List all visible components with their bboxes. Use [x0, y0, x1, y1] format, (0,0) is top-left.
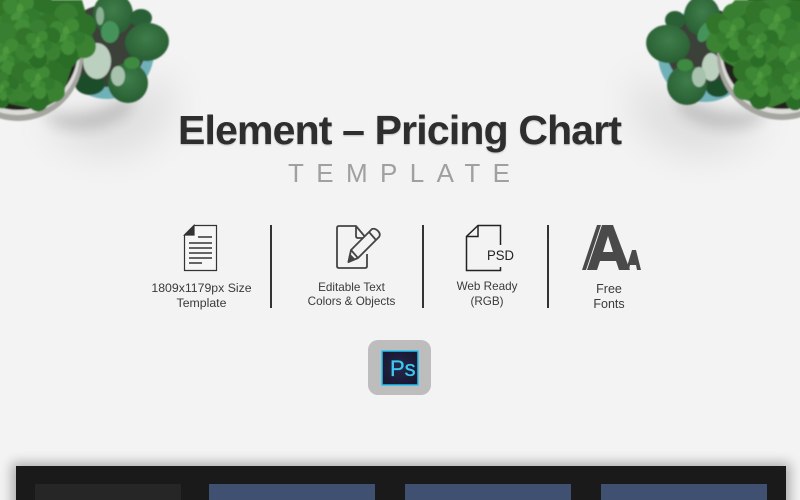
feature: editable text: Colors & Objects — [308, 295, 395, 308]
label: Web Ready — [457, 280, 518, 293]
icon: A4 document — [184, 226, 216, 270]
icon: page with pencil — [337, 226, 380, 268]
divider — [270, 225, 272, 308]
feature: free fonts: Fonts — [593, 297, 625, 311]
feature: size template — [151, 226, 252, 310]
plant shadow: right — [635, 70, 770, 153]
feature: web ready — [457, 226, 518, 308]
feature: web ready: (RGB) — [470, 295, 504, 308]
icon: PSD file: PSD — [487, 247, 514, 263]
column: plan 3 — [601, 484, 767, 500]
label: Editable Text — [318, 281, 386, 294]
column: plan 2 — [405, 484, 571, 500]
pricing chart preview — [12, 463, 790, 500]
icon: letters A a — [582, 225, 641, 270]
panel shadow — [12, 463, 790, 500]
subtitle: TEMPLATE — [288, 158, 510, 188]
divider — [547, 225, 549, 308]
feature: free fonts — [582, 225, 641, 311]
jade plant right — [643, 0, 752, 105]
label: Free — [596, 282, 622, 296]
plant shadow: left — [40, 70, 170, 153]
jade plant left — [60, 0, 171, 103]
plants: top left — [0, 0, 171, 121]
succulent left — [0, 0, 100, 121]
plants: top right — [643, 0, 800, 120]
icon: Photoshop badge — [368, 340, 431, 395]
label: 1809x1179px Size — [151, 281, 252, 295]
column: plan 1 — [209, 484, 375, 500]
feature: editable text — [308, 226, 395, 308]
icon: Photoshop badge: Ps — [390, 356, 416, 381]
column: labels — [35, 484, 181, 500]
panel — [16, 466, 786, 500]
succulent right — [702, 0, 800, 120]
feature: size template: Template — [177, 296, 227, 310]
title: Element – Pricing Chart — [178, 107, 622, 153]
divider — [422, 225, 424, 308]
